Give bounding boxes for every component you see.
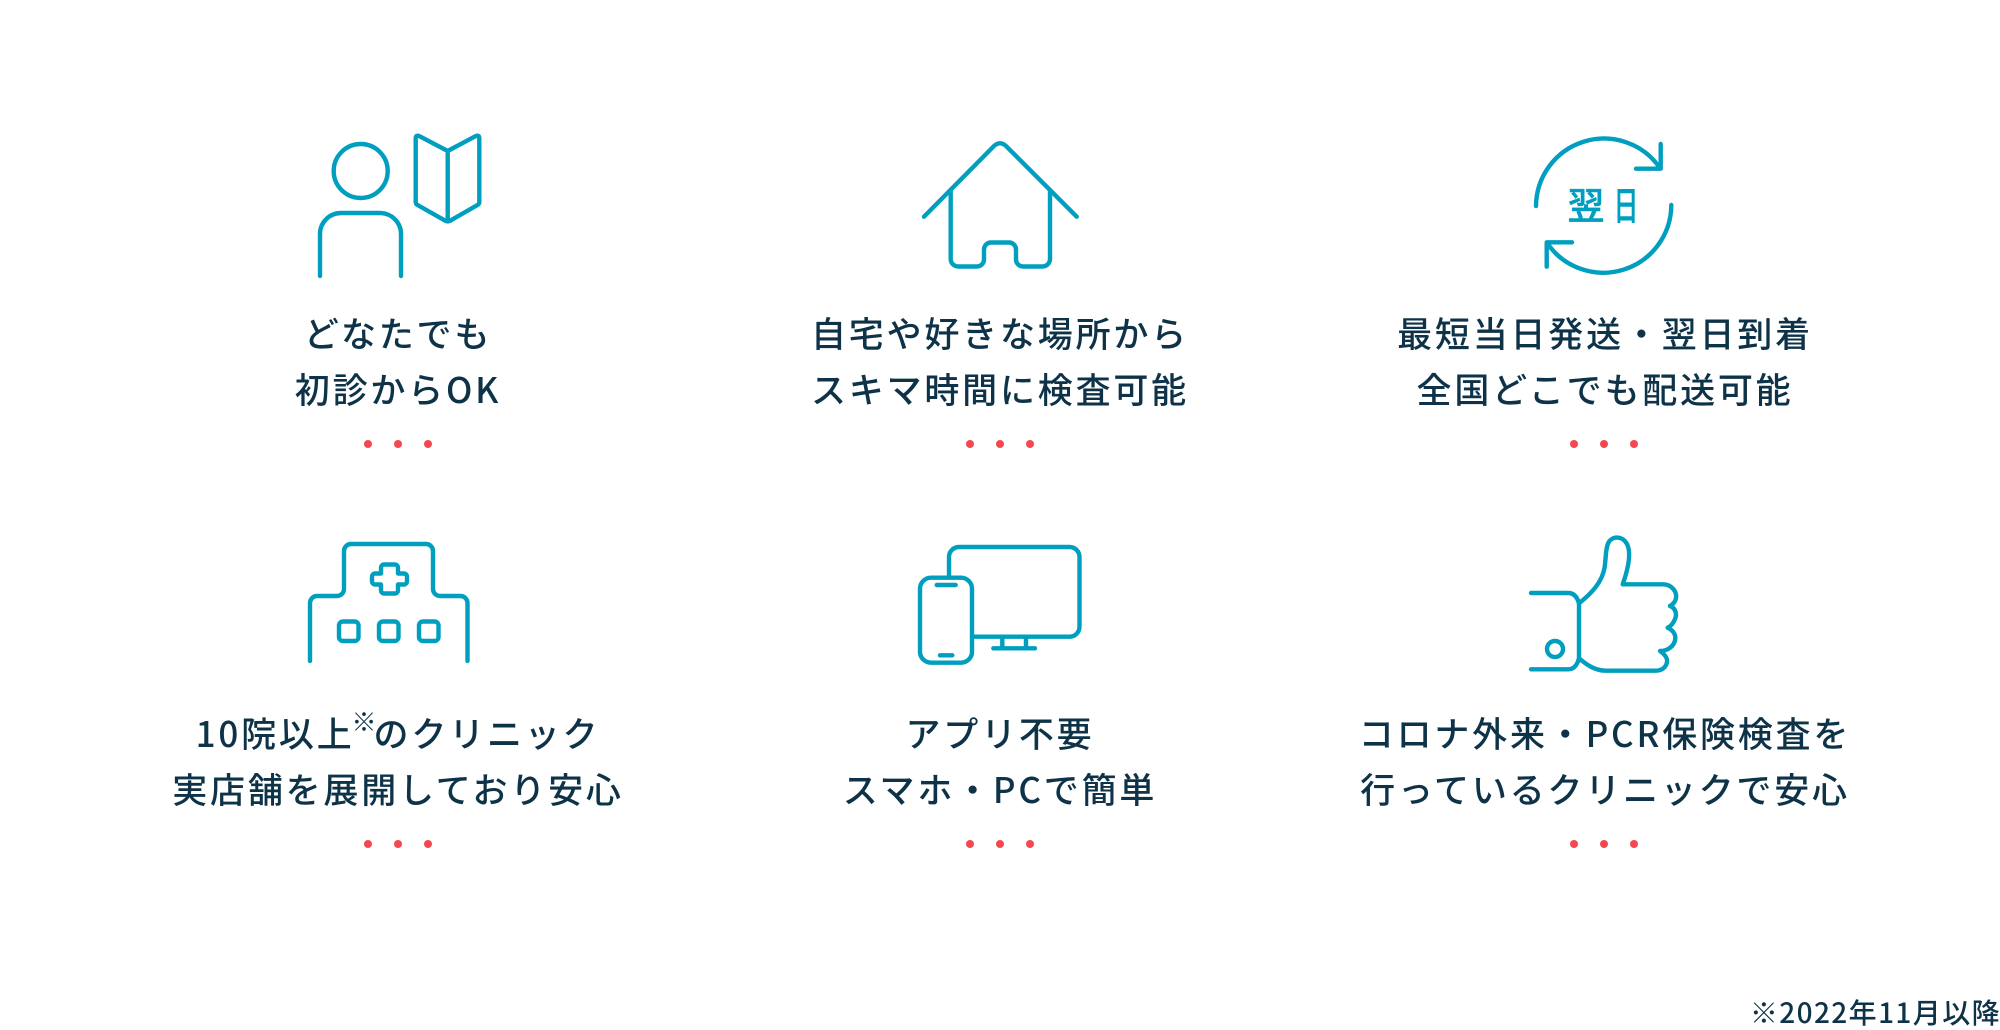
dots: row 1 column 1 (364, 440, 432, 448)
text: test anywhere (811, 307, 1189, 414)
text: test anywhere: 自宅や好きな場所から (811, 307, 1189, 358)
text: no app needed: スマホ・PCで簡単 (843, 763, 1157, 814)
icon: clinic building (310, 544, 468, 661)
text: first visit OK (295, 307, 501, 414)
icon: thumbs up (1531, 538, 1676, 671)
text: covid clinics (1359, 707, 1851, 814)
icon: monitor and smartphone (920, 547, 1080, 663)
dots: row 1 column 3 (1570, 440, 1638, 448)
text: next-day delivery: 最短当日発送・翌日到着 (1397, 307, 1813, 358)
text: clinics: 実店舗を展開しており安心 (172, 763, 624, 814)
text: first visit OK: 初診からOK (295, 363, 501, 414)
icon: next-day refresh arrows: 翌 (1568, 176, 1604, 230)
text: no app needed: アプリ不要 (905, 707, 1094, 758)
text: clinics (172, 703, 624, 814)
text: covid clinics: コロナ外来・PCR保険検査を (1359, 707, 1851, 758)
dots: row 2 column 3 (1570, 840, 1638, 848)
text: first visit OK: どなたでも (304, 307, 492, 358)
dots: row 2 column 1 (364, 840, 432, 848)
text: clinics: 10院以上※のクリニック (196, 703, 600, 758)
icon: next-day refresh arrows (1536, 139, 1671, 273)
icon: house (924, 143, 1077, 266)
icon: person with book (320, 136, 479, 276)
dots: row 1 column 2 (966, 440, 1034, 448)
dots: row 2 column 2 (966, 840, 1034, 848)
text: covid clinics: 行っているクリニックで安心 (1360, 763, 1850, 814)
text: no app needed (843, 707, 1157, 814)
icon: next-day refresh arrows: 日 (1614, 176, 1638, 232)
text: next-day delivery: 全国どこでも配送可能 (1417, 363, 1793, 414)
text: next-day delivery (1397, 307, 1813, 414)
text: test anywhere: スキマ時間に検査可能 (811, 363, 1189, 414)
